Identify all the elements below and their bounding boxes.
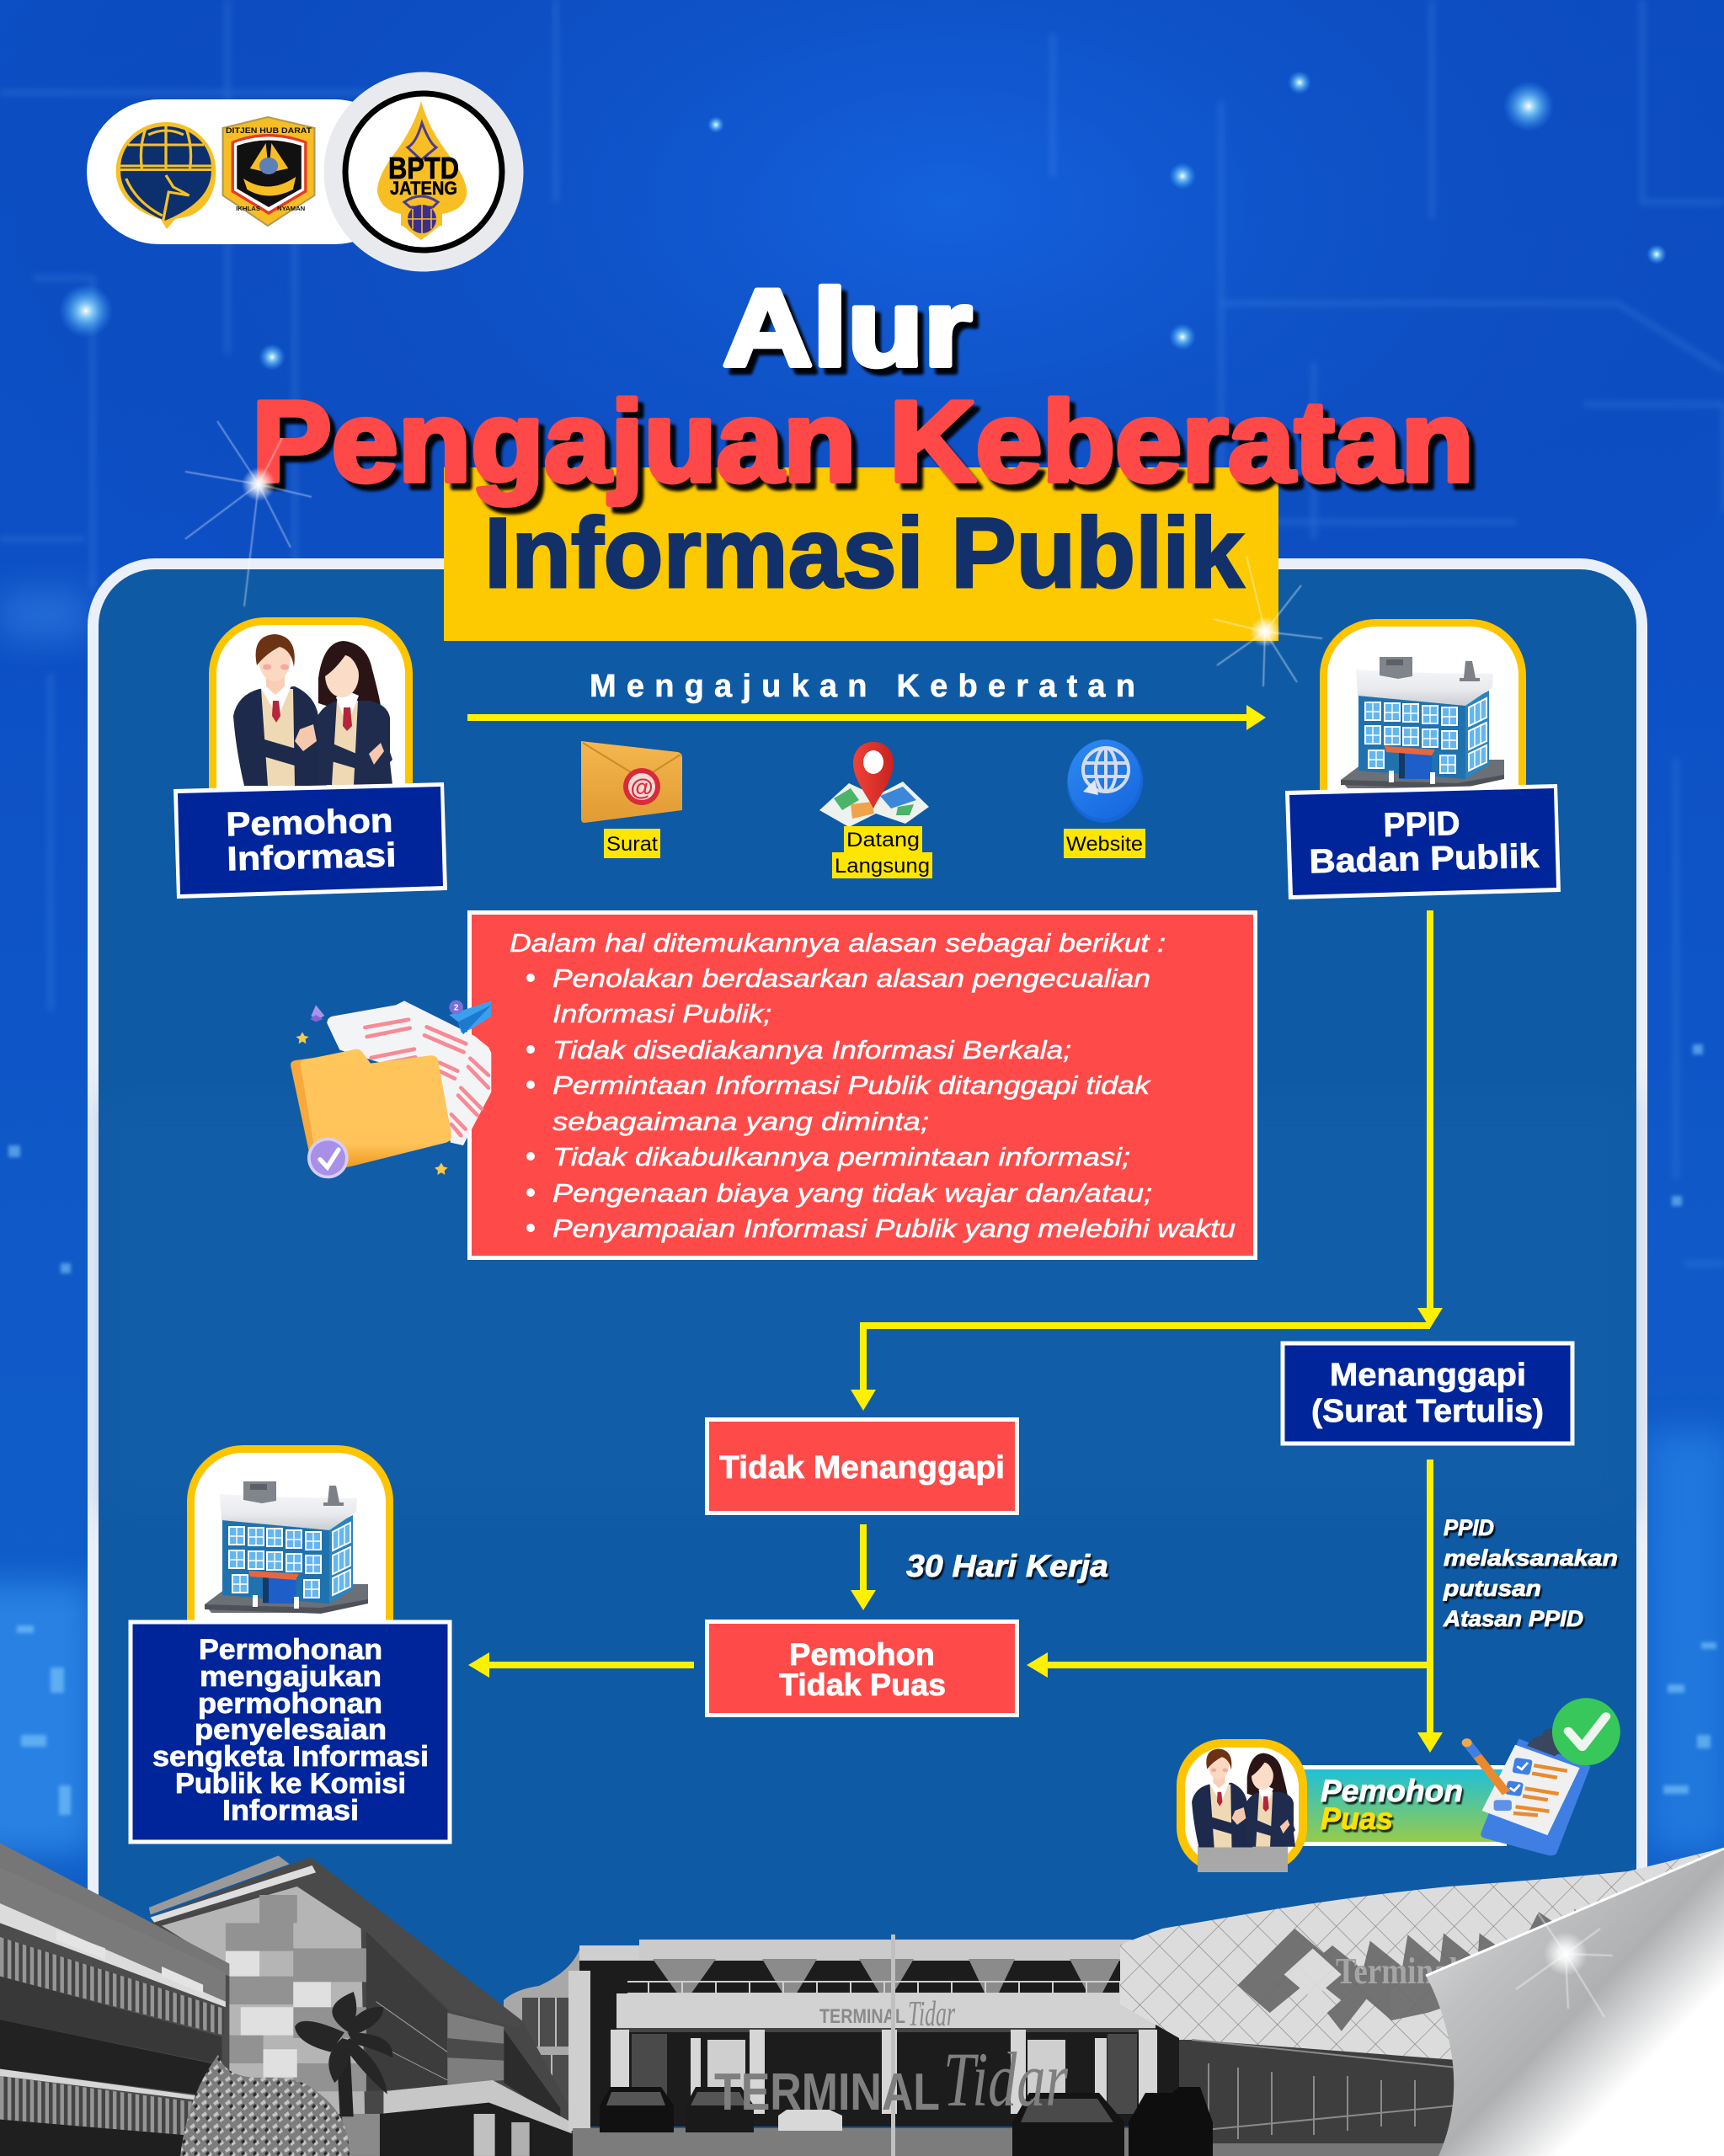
buildings photo strip: [0, 1843, 1724, 2156]
icon: website globe: [1059, 733, 1150, 830]
title: Informasi Publik: Informasi Publik: [484, 498, 1244, 609]
text: PPID melaksanakan putusan: putusan: [1443, 1576, 1541, 1601]
sign: Terminal Tidar big: Tidar: [943, 2036, 1069, 2122]
label: Datang Langsung: [832, 826, 932, 878]
card: Permohonan sengketa: [131, 1445, 450, 1842]
heading: Mengajukan Keberatan: Mengajukan Keberatan: [590, 669, 1135, 704]
label: PPID Badan Publik: PPID: [1383, 805, 1460, 844]
arrow: to Permohonan box: [468, 1652, 694, 1678]
text: PPID melaksanakan putusan: [1443, 1515, 1618, 1631]
icon: map pin: [819, 742, 929, 827]
frame with people: [1177, 1739, 1307, 1872]
label: Website: [1064, 829, 1145, 858]
cars: [600, 2087, 1179, 2156]
logo: BPTD Jateng badge: BPTD: [388, 151, 459, 185]
list text: Informasi Publik;: [552, 999, 771, 1028]
logo: Ditjen Hub Darat shield: IKHLAS: [236, 205, 260, 212]
label: Surat: Surat: [606, 833, 658, 856]
title: Alur: Alur: [723, 266, 972, 389]
text: PPID melaksanakan putusan: PPID: [1444, 1515, 1494, 1540]
sign: Terminal Tidar small: Tidar: [908, 1995, 955, 2034]
box: Tidak Menanggapi: [707, 1420, 1017, 1513]
label: Website: Website: [1066, 833, 1143, 856]
list text: Pengenaan biaya yang tidak wajar dan/atau;: [552, 1178, 1152, 1208]
list text: [552, 963, 1236, 1243]
arrow: to Pemohon Tidak Puas: [1027, 1652, 1430, 1678]
page curl: [1426, 1849, 1724, 2156]
bullets: [526, 974, 535, 1232]
box: Pemohon Tidak Puas: [707, 1622, 1017, 1715]
box: Tidak Menanggapi: Tidak Menanggapi: [719, 1450, 1005, 1486]
logo: Kemenhub globe: [116, 122, 216, 229]
banner: yellow title plate: [444, 467, 1278, 641]
label: Pemohon Puas gradient: Puas: [1321, 1801, 1393, 1836]
sign: Terminal facade: Terminal: [1336, 1951, 1458, 1992]
icon: folder with documents: [291, 1001, 491, 1178]
arrow: Menanggapi to Pemohon Puas: [1417, 1460, 1443, 1753]
box: Permohonan text: sengketa Informasi: [152, 1741, 429, 1773]
title: Pengajuan Keberatan: Pengajuan Keberatan: [252, 377, 1474, 505]
building: curved glass wing: [504, 1945, 581, 2156]
box: Permohonan text: [131, 1622, 450, 1842]
star glint: left of title: [185, 421, 312, 606]
box: Menanggapi: [1283, 1343, 1572, 1444]
arrow: branch to Tidak Menanggapi: [851, 1322, 1430, 1411]
text: PPID melaksanakan putusan: Atasan PPID: [1443, 1606, 1583, 1631]
palm tree: [295, 1992, 392, 2116]
logo: Ditjen Hub Darat shield: [223, 117, 314, 226]
card: Pemohon Informasi: [173, 617, 447, 899]
facade dark diamonds: [1237, 1891, 1642, 2031]
box: Pemohon Tidak Puas: Pemohon: [789, 1637, 935, 1672]
building: left campus: [0, 1843, 229, 2156]
label: Pemohon Puas gradient: Pemohon: [1321, 1774, 1463, 1808]
list text: sebagaimana yang diminta;: [552, 1107, 929, 1136]
card frame with people: [209, 617, 413, 800]
building: Terminal facade with diamonds: [1120, 1848, 1724, 2156]
list text: Penolakan berdasarkan alasan pengecualian: [552, 963, 1150, 993]
label: PPID Badan Publik: Badan Publik: [1309, 838, 1540, 880]
icon: folder with documents: 2: [454, 1003, 459, 1012]
text: PPID melaksanakan putusan: melaksanakan: [1444, 1545, 1618, 1571]
arrow: PPID to Menanggapi: [1417, 910, 1443, 1328]
logo group: [87, 72, 524, 271]
sign: Terminal Tidar big: [714, 2036, 1069, 2122]
icon: clipboard with check: [1462, 1698, 1620, 1855]
box: Permohonan text: Permohonan: [199, 1634, 382, 1666]
panel: main flow panel: [93, 564, 1642, 2156]
icon: envelope: @: [630, 774, 654, 800]
building: left tower: [149, 1855, 579, 2156]
box: Permohonan text: mengajukan: [200, 1661, 382, 1693]
label: Datang Langsung: Datang: [846, 829, 920, 851]
card frame with building: [187, 1445, 393, 1625]
box: Permohonan text: permohonan: [198, 1688, 382, 1720]
icon: envelope: [581, 741, 682, 823]
logo: BPTD Jateng badge: [323, 72, 524, 271]
list text: Tidak dikabulkannya permintaan informasi;: [552, 1142, 1130, 1171]
sign: Terminal Tidar big: TERMINAL: [714, 2063, 940, 2121]
label: Pemohon Informasi: Informasi: [227, 837, 397, 878]
sign: Terminal Tidar small: [819, 1995, 955, 2034]
box: Pemohon Tidak Puas: Tidak Puas: [779, 1668, 946, 1702]
text: intro line: Dalam hal ditemukannya alasan sebagai berikut :: [510, 928, 1166, 958]
box: Permohonan text: penyelesaian: [195, 1714, 387, 1746]
panel: reasons list: [470, 913, 1255, 1258]
bushes: [180, 2055, 350, 2156]
logo: Ditjen Hub Darat shield: DITJEN HUB DARAT: [226, 126, 312, 136]
logo: Ditjen Hub Darat shield: NYAMAN: [277, 205, 305, 212]
list text: Tidak disediakannya Informasi Berkala;: [552, 1035, 1071, 1065]
box: Menanggapi: (Surat Tertulis): [1311, 1394, 1544, 1429]
logo pill: [87, 99, 407, 244]
card: PPID Badan Publik: [1285, 619, 1561, 899]
star glint: banner corner: [1213, 556, 1322, 686]
label: Pemohon Puas gradient: [1300, 1765, 1507, 1846]
sign: Terminal Tidar small: TERMINAL: [819, 2005, 905, 2028]
label: Datang Langsung: Langsung: [835, 855, 930, 878]
text: 30 Hari Kerja: 30 Hari Kerja: [906, 1549, 1108, 1583]
card: Pemohon Puas: [1177, 1698, 1620, 1872]
box: Permohonan text: Informasi: [222, 1795, 359, 1827]
logo: BPTD Jateng badge: JATENG: [390, 178, 457, 199]
list text: Permintaan Informasi Publik ditanggapi tidak: [552, 1070, 1151, 1100]
building: Terminal Tidar: [568, 1935, 1182, 2156]
label: PPID Badan Publik: [1285, 784, 1561, 899]
box: Menanggapi: Menanggapi: [1330, 1358, 1526, 1393]
box: Permohonan text: Publik ke Komisi: [175, 1768, 406, 1800]
arrow: to PPID: [467, 705, 1266, 730]
label: Pemohon Informasi: [173, 782, 447, 899]
list text: Penyampaian Informasi Publik yang melebihi waktu: [552, 1214, 1236, 1243]
label: Pemohon Informasi: Pemohon: [226, 803, 393, 843]
card frame with building: [1320, 619, 1526, 804]
label: Surat: [604, 829, 660, 858]
arrow: Tidak Menanggapi to Pemohon Tidak Puas: [851, 1524, 876, 1610]
